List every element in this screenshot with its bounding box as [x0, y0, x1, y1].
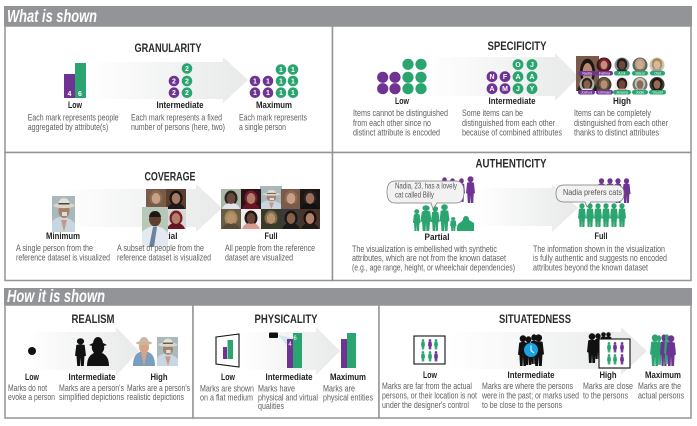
portraits with names: Nadia [582, 72, 592, 76]
labels and descriptions: granularity: Intermediate [156, 100, 204, 110]
heading: granularity: GRANULARITY [134, 41, 202, 55]
panel: authenticity [332, 152, 691, 280]
heading: situatedness: SITUATEDNESS [499, 312, 571, 326]
labels and descriptions: realism: evoke a person [8, 392, 55, 403]
icon: bars on flat screen [216, 334, 239, 367]
chart: maximum marks [250, 64, 298, 98]
chart: initials marks: O [515, 62, 521, 69]
portraits with names: Yousef [652, 91, 663, 95]
panel: granularity [5, 26, 332, 152]
labels and descriptions: physicality: physical entities [323, 392, 373, 403]
chart: maximum marks: 1 [253, 90, 257, 97]
labels and descriptions: specificity: distinguished from each other [462, 118, 556, 129]
chart: aggregated bars: 6 [78, 91, 82, 98]
chart: initials marks: J [516, 86, 520, 93]
labels and descriptions: situatedness: Marks are the [638, 381, 681, 392]
arrow: specificity scale [425, 53, 579, 101]
icon: dot mark [28, 347, 36, 355]
panel: realism [5, 305, 193, 418]
labels and descriptions: specificity: thanks to distinct attributes [574, 127, 659, 138]
labels and descriptions: physicality: qualities [258, 401, 284, 412]
labels and descriptions: granularity: number of persons (here, two) [131, 122, 225, 133]
icon: projected physical bars: 6 [293, 336, 297, 342]
descriptions: coverage: dataset are visualized [225, 253, 293, 264]
icon: crowd with clock [518, 334, 544, 366]
labels and descriptions: authenticity: attributes beyond the known dataset [533, 263, 648, 274]
panel: coverage [5, 152, 332, 280]
chart: initials marks [487, 59, 537, 94]
labels and descriptions: physicality: physical and virtual [258, 392, 318, 403]
icon: simplified person [75, 338, 86, 366]
labels and descriptions: specificity: distinct attribute is encoded [353, 127, 440, 138]
heading: authenticity: AUTHENTICITY [476, 157, 546, 171]
portraits with names: Fatima [599, 72, 610, 76]
arrow: situatedness scale [448, 327, 647, 375]
photos: partial coverage [142, 189, 186, 247]
chart: maximum marks: 1 [279, 90, 283, 97]
labels and descriptions: granularity: Low [68, 100, 83, 110]
labels and descriptions: granularity [28, 100, 307, 133]
descriptions: coverage: reference dataset is visualized [117, 253, 211, 264]
icon: illustrated portrait [133, 337, 155, 366]
portraits with names: Marul [636, 72, 645, 76]
panel: specificity [332, 26, 691, 152]
section header: How it is shown [4, 286, 692, 306]
labels and descriptions: physicality: Maximum [330, 372, 366, 382]
chart: aggregated bars: 4 [68, 91, 72, 98]
icon: people as marks [650, 334, 676, 366]
panel: situatedness [379, 305, 691, 418]
labels and descriptions: authenticity: Partial [424, 232, 450, 242]
labels and descriptions: realism: High [150, 372, 168, 382]
speech bubble: synthetic attribute [387, 181, 464, 209]
icon: display beside crowd [587, 332, 630, 368]
labels: coverage [46, 231, 278, 241]
arrow: authenticity scale [475, 184, 578, 232]
icon: silhouette bust [87, 337, 109, 366]
labels and descriptions: situatedness: Marks are close [583, 381, 633, 392]
icon: remote display [414, 336, 445, 364]
labels and descriptions: specificity: High [613, 96, 631, 106]
labels and descriptions: situatedness: Low [423, 370, 438, 380]
chart: intermediate marks: 2 [185, 66, 189, 73]
chart: maximum marks: 1 [279, 67, 283, 74]
labels and descriptions: specificity: Intermediate [488, 96, 536, 106]
heading: specificity: SPECIFICITY [488, 39, 546, 53]
arrow: coverage scale [60, 184, 222, 232]
portraits with names [576, 56, 666, 95]
speech bubble: authentic statement [556, 185, 624, 207]
labels: coverage: Partial [152, 231, 178, 241]
labels and descriptions: granularity: a single person [239, 122, 286, 133]
labels: coverage: Full [264, 231, 278, 241]
heading: realism: REALISM [72, 312, 115, 326]
chart: initials marks: Y [530, 86, 535, 93]
heading: physicality: PHYSICALITY [254, 312, 318, 326]
labels: coverage: Minimum [46, 231, 80, 241]
portraits with names: Amir [618, 72, 626, 76]
labels and descriptions: authenticity: attributes, which are not from the known dataset [352, 253, 506, 264]
labels and descriptions: realism: realistic depictions [127, 392, 184, 403]
labels and descriptions: granularity: Maximum [256, 100, 292, 110]
labels and descriptions: situatedness: to be close to the persons [482, 400, 562, 411]
chart: initials marks: F [503, 74, 508, 81]
labels and descriptions: specificity: because of combined attributes [462, 127, 562, 138]
photo: minimum coverage [52, 196, 75, 232]
labels and descriptions: situatedness: were in the past; or marks used [481, 391, 579, 402]
labels and descriptions: situatedness: Maximum [645, 370, 681, 380]
people: partial authenticity [413, 176, 475, 231]
labels and descriptions: specificity [353, 96, 669, 138]
chart: initials marks: J [530, 62, 534, 69]
descriptions: coverage: A single person from the [16, 243, 93, 254]
chart: initials marks: M [502, 86, 508, 93]
portraits with names: Joshua [581, 91, 592, 95]
labels and descriptions: physicality: on a flat medium [200, 392, 253, 403]
labels and descriptions: physicality: Marks are [323, 384, 355, 395]
arrow: realism scale [27, 327, 139, 376]
icon: projected physical bars: 4 [288, 342, 292, 348]
labels and descriptions: specificity: from each other since no [353, 118, 431, 129]
chart: initials marks: A [515, 74, 521, 81]
photos: full coverage [221, 186, 320, 229]
labels and descriptions: physicality: Marks have [258, 384, 295, 395]
labels and descriptions: situatedness: Intermediate [508, 370, 554, 380]
labels and descriptions: authenticity: The visualization is embellished with synthetic [352, 244, 497, 255]
labels and descriptions: authenticity: (e.g., age range, height, or wheelchair dependencies) [352, 263, 515, 274]
chart: initials marks: A [529, 74, 535, 81]
labels and descriptions: specificity: Items cannot be distinguished [353, 108, 448, 119]
labels and descriptions: specificity: Low [395, 96, 410, 106]
chart: initials marks: A [489, 86, 495, 93]
heading: coverage: COVERAGE [144, 170, 196, 184]
photo: realistic portrait [157, 337, 178, 366]
descriptions: coverage: A subset of people from the [117, 243, 204, 254]
chart: intermediate marks [169, 63, 192, 98]
labels and descriptions: situatedness: High [600, 370, 617, 380]
arrow: granularity scale [86, 57, 248, 103]
icon: projected physical bars [269, 332, 302, 368]
descriptions: coverage: reference dataset is visualized [16, 253, 110, 264]
panel: physicality [193, 305, 379, 418]
portraits with names: Jeremy [616, 91, 628, 95]
labels and descriptions: situatedness: Marks are where the persons [482, 381, 573, 392]
chart: maximum marks: 1 [291, 67, 295, 74]
labels and descriptions: situatedness: persons, or their location is not [382, 391, 477, 402]
chart: maximum marks: 1 [279, 78, 283, 86]
speech bubble: synthetic attribute: cat called Billy [395, 190, 435, 200]
labels and descriptions: physicality: Marks are shown [200, 384, 254, 395]
chart: intermediate marks: 2 [185, 90, 189, 97]
speech bubble: synthetic attribute: Nadia, 23, has a lovely [395, 181, 457, 191]
labels and descriptions: physicality: Intermediate [266, 372, 312, 382]
people: full authenticity [578, 178, 630, 227]
labels and descriptions: situatedness: to the persons [583, 391, 628, 402]
section header: What is shown: What is shown [7, 6, 97, 26]
labels and descriptions: situatedness: Marks are far from the actual [382, 381, 472, 392]
arrow: physicality scale [240, 327, 340, 375]
chart: maximum marks: 1 [266, 90, 270, 97]
labels and descriptions: situatedness: under the designer's control [382, 400, 469, 411]
labels and descriptions: specificity: Some items can be [462, 108, 523, 119]
icon: physical bars [341, 333, 356, 368]
chart: initials marks: N [489, 74, 495, 81]
portraits with names: Jodie [636, 91, 644, 95]
labels and descriptions: physicality [200, 372, 373, 412]
portraits with names: Ishmael [598, 91, 611, 95]
speech bubble: authentic statement: Nadia prefers cats [563, 187, 622, 197]
chart: intermediate marks: 2 [185, 78, 189, 86]
section header: What is shown [4, 6, 692, 26]
labels and descriptions: realism: Intermediate [68, 372, 116, 382]
labels and descriptions: authenticity [352, 231, 667, 274]
labels and descriptions: granularity: Each mark represents a fixed [131, 112, 222, 124]
labels and descriptions: granularity: Each mark represents people [28, 112, 119, 124]
descriptions: coverage: All people from the reference [225, 243, 315, 254]
chart: intermediate marks: 2 [172, 90, 176, 97]
chart: intermediate marks: 2 [172, 78, 176, 86]
labels and descriptions: realism: Marks are a person's [127, 383, 190, 394]
chart: aggregated bars [64, 63, 86, 98]
chart: maximum marks: 1 [253, 78, 257, 86]
chart: maximum marks: 1 [291, 78, 295, 86]
chart: undistinguished marks [377, 59, 427, 94]
labels and descriptions: realism: simplified depictions [59, 392, 124, 403]
chart: maximum marks: 1 [266, 78, 270, 86]
labels and descriptions: authenticity: Full [594, 231, 608, 241]
chart: maximum marks: 1 [291, 90, 295, 97]
portraits with names: Olaf [654, 72, 661, 76]
labels and descriptions: granularity: Each mark represents [239, 112, 307, 124]
labels and descriptions: realism: Marks are a person's [59, 383, 124, 394]
labels and descriptions: situatedness [382, 370, 684, 411]
labels and descriptions: specificity: distinguished from each other [574, 118, 669, 129]
labels and descriptions: physicality: Low [221, 372, 236, 382]
labels and descriptions: realism: Low [25, 372, 40, 382]
labels and descriptions: realism: Marks do not [8, 383, 47, 394]
labels and descriptions: realism [8, 372, 190, 403]
labels and descriptions: specificity: Items can be completely [574, 108, 651, 119]
section header: How it is shown: How it is shown [7, 286, 105, 306]
descriptions: coverage [16, 243, 315, 264]
labels and descriptions: granularity: aggregated by attribute(s) [28, 122, 108, 133]
